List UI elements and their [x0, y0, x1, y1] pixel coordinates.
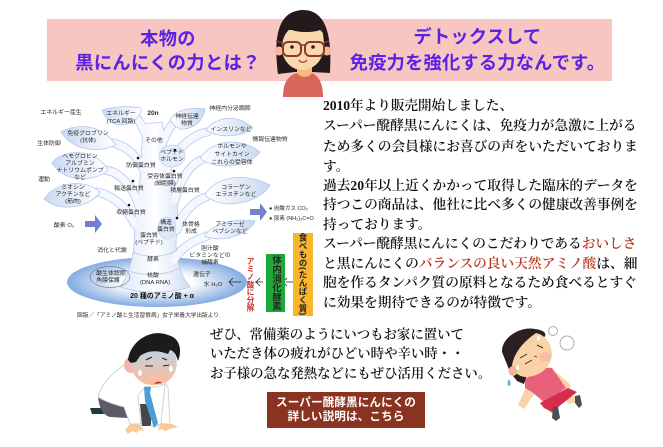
leaf: neurotransmitter: 物質 — [181, 119, 193, 127]
trunk labels: その他 — [145, 136, 163, 144]
leaf: immunoglobulin: 免疫グロブリン — [67, 129, 109, 137]
heading: left question — [75, 29, 261, 72]
trunk labels: 体骨格 — [182, 220, 200, 228]
trunk labels: 蛋白質 — [157, 225, 175, 233]
leaf: hemoglobin: など — [74, 173, 86, 181]
trunk labels: (ペプチド) — [135, 239, 163, 246]
heading: left question: 本物の — [140, 29, 196, 49]
text block: product description: 持つこの商品は、他社に比べ多くの健康改善事例を — [323, 197, 638, 212]
trunk labels: 積層蛋白質 — [170, 186, 200, 194]
leaf: hormones — [200, 142, 260, 166]
leaf: immunoglobulin — [61, 126, 116, 150]
leaf: myosin: (筋肉) — [65, 197, 81, 205]
leaf: insulin: インスリンなど — [210, 125, 252, 133]
leaf: energy — [102, 107, 141, 125]
leaf: hormones: ホルモンや — [217, 142, 247, 150]
outputs: CO2 and urea: ● 炭酸ガス CO₂ — [269, 204, 308, 212]
icon: woman with glasses — [274, 10, 332, 97]
digestive enzyme column — [266, 254, 285, 312]
text block: product description: スーパー醗酵黒にんにくのこだわりであるおいしさ — [323, 236, 636, 251]
leaf: hemoglobin: ナトリウムポンプ — [57, 166, 104, 174]
leaf: immunoglobulin: (抗体) — [80, 136, 96, 144]
text block: product description: 過去20年以上近くかかって取得した臨床的データを — [323, 178, 638, 193]
arrows: digestion flow — [229, 278, 294, 286]
text block: product description: スーパー醗酵黒にんにくは、免疫力が急激に上がる — [323, 118, 636, 133]
leaf: hormones: これらの受容体 — [211, 158, 253, 166]
chart: amino acid tree diagram — [37, 104, 314, 319]
trunk labels: ホルモン — [160, 156, 184, 163]
text block: product description: す。 — [323, 159, 349, 174]
header band — [47, 19, 612, 81]
trunk labels: ビタミンなどの — [189, 251, 231, 259]
heading labels around tree: 20n — [147, 110, 159, 117]
food column — [293, 233, 313, 316]
leaf: neurotransmitter — [170, 108, 205, 129]
text block: product description: 2010年より販売開始しました、 — [323, 98, 513, 113]
bullets on tree — [128, 149, 178, 219]
trunk labels: 遺伝子 — [193, 270, 211, 278]
heading labels around tree: エネルギー産生 — [40, 108, 82, 116]
trunk labels: 構造 — [160, 218, 172, 226]
digestive enzyme column: 体内消化酵素 — [271, 255, 281, 311]
text block: recommendation: ぜひ、常備薬のようにいつもお家に置いて — [210, 327, 464, 342]
heading labels around tree: 神経内分泌調節 — [209, 104, 251, 112]
tree trunk and branches — [97, 115, 207, 292]
trunk labels: 核酸 — [147, 271, 159, 279]
trunk labels: (細胞膜) — [154, 179, 176, 187]
outputs: CO2 and urea: ● 尿素 (NH₂)₂C=O — [269, 214, 314, 222]
trunk labels — [97, 136, 231, 288]
leaf: energy: エネルギー — [106, 110, 136, 117]
text block: product description: に効果を期待できるのが特徴です。 — [323, 295, 541, 310]
trunk labels: 輸送蛋白質 — [114, 184, 144, 192]
text block: product description: と黒にんにくのバランスの良い天然アミノ酸は、細 — [323, 256, 637, 271]
trunk labels: (DNA RNA) — [140, 280, 170, 286]
heading labels around tree: 酸素 O₂ — [54, 221, 74, 229]
membrane ring: cell regulation: 角膜保護 — [96, 276, 120, 284]
text block: product description — [323, 98, 638, 310]
leaf: neurotransmitter: 神経伝達 — [175, 112, 199, 120]
icon: exhausted businessman — [90, 333, 180, 434]
icon: sick girl lying down — [502, 326, 582, 421]
arrow: oxygen in — [85, 215, 102, 233]
text block: product description: 持っております。 — [323, 217, 431, 232]
arrow: carbon dioxide out — [250, 203, 267, 221]
button: more details — [267, 392, 425, 428]
trunk labels: ペプチド — [160, 149, 184, 156]
trunk labels: 収縮蛋白質 — [116, 208, 146, 216]
trunk labels: 胆汁酸 — [201, 244, 219, 252]
leaf: amylase: ペプシンなど — [212, 227, 248, 235]
leaf: hormones: サイトカイン — [214, 151, 250, 158]
text block: recommendation — [210, 327, 491, 381]
leaf: hemoglobin: ヘモグロビン — [62, 152, 98, 160]
trunk labels: 形成 — [185, 227, 197, 235]
heading labels around tree: 運動 — [38, 175, 50, 183]
heading: right answer — [350, 27, 605, 73]
food column: 食べもの(たんぱく質) — [298, 233, 308, 316]
trunk labels: 補酵素 — [201, 258, 219, 266]
leaf: amylase — [205, 220, 255, 239]
caption: 図版／「アミノ酸と生活習慣病」女子栄養大学出版より — [77, 311, 219, 319]
button: more details: スーパー醗酵黒にんにくの — [276, 396, 416, 409]
leaf: collagen: エラスチンなど — [215, 190, 257, 198]
heading: right answer: 免疫力を強化する力なんです。 — [350, 53, 605, 73]
trunk labels: 受容体蛋白質 — [147, 172, 183, 180]
membrane ring: cell regulation: 酸生体認節 — [96, 269, 126, 277]
leaf: energy: (TCA 回路) — [107, 117, 135, 125]
leaf: amylase: アミラーゼ — [215, 220, 245, 228]
leaf: myosin: ミオシン — [61, 184, 85, 191]
trunk labels: 酵素 — [147, 255, 159, 263]
heading: right answer: デトックスして — [414, 27, 541, 47]
trunk labels: 水 H₂O — [204, 280, 223, 288]
heading labels around tree: 情報伝達物質 — [252, 135, 288, 143]
leaf: myosin — [44, 184, 100, 207]
leaf: collagen — [205, 177, 270, 204]
amino acid pool ellipse — [67, 257, 247, 307]
button: more details: 詳しい説明は、こちら — [288, 410, 404, 422]
trunk labels: 消化と代謝 — [97, 246, 127, 254]
leaf: hemoglobin — [52, 152, 108, 181]
text block: product description: ため多くの会員様にお喜びの声をいただいておりま — [323, 139, 638, 154]
trunk labels: 防御蛋白質 — [126, 161, 156, 169]
text block: product description: 胞を作るタンパク質の原料となるため食べるとすぐ — [323, 275, 637, 290]
heading labels around tree: 生体防御 — [37, 139, 61, 147]
leaf: insulin — [206, 118, 253, 136]
text block: recommendation: お子様の急な発熱などにもぜひ活用ください。 — [210, 366, 491, 381]
amino acid breakdown label: アミノ酸に分解 — [246, 257, 255, 311]
trunk labels: 蛋白質 — [140, 231, 158, 239]
leaf: myosin: アクチンなど — [55, 190, 91, 198]
text block: recommendation: いただき体の疲れがひどい時や辛い時・・ — [210, 346, 464, 361]
heading labels around tree — [37, 104, 288, 300]
leaf: hemoglobin: アルブミン — [65, 159, 95, 167]
heading labels around tree: 20 種のアミノ酸 + α — [130, 291, 195, 300]
leaf: collagen: コラーゲン — [221, 183, 251, 191]
outputs: CO2 and urea — [269, 204, 314, 222]
heading: left question: 黒にんにくの力とは？ — [75, 52, 261, 72]
membrane ring: cell regulation — [90, 266, 130, 288]
